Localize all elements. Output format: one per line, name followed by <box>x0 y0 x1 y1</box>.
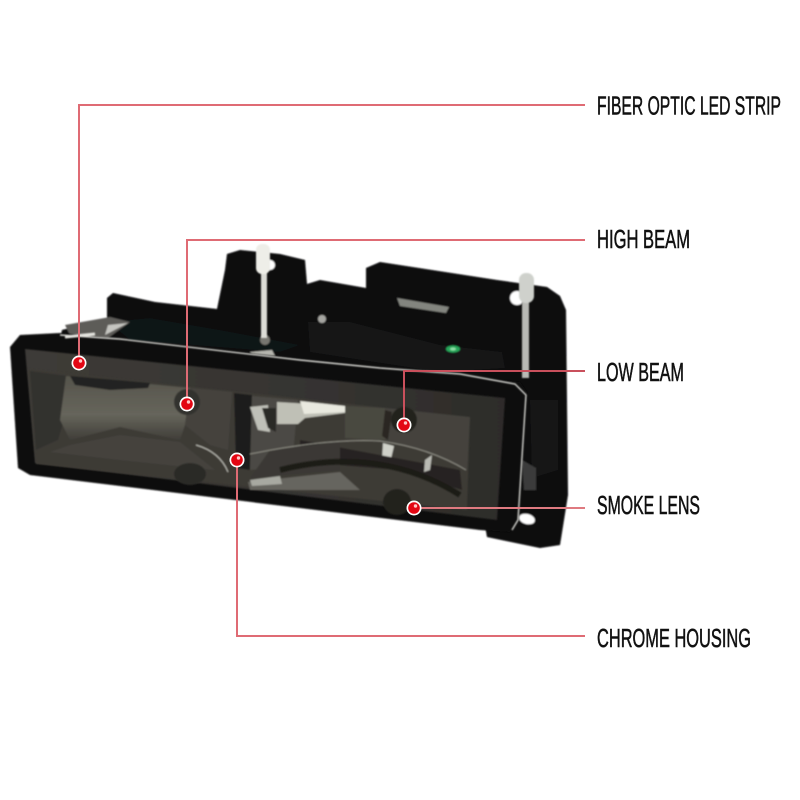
label: SMOKE LENS <box>597 492 700 520</box>
callout: smoke lens <box>406 492 700 520</box>
callout: fiber optic LED strip <box>72 92 781 370</box>
mounting pins <box>256 244 534 378</box>
label: LOW BEAM <box>597 359 684 387</box>
marker dot <box>230 452 244 468</box>
leader line <box>414 507 585 509</box>
callout: low beam <box>396 359 684 432</box>
rear housing <box>60 250 568 548</box>
lens interior reflectors <box>28 369 470 515</box>
marker dot <box>406 500 422 516</box>
chrome trim <box>60 334 526 530</box>
callout: high beam <box>180 226 690 412</box>
label: HIGH BEAM <box>597 226 690 254</box>
leader line <box>79 105 585 363</box>
smoke lens face <box>25 349 505 520</box>
leader line <box>404 371 585 425</box>
callout: chrome housing <box>230 452 751 653</box>
marker dot <box>180 396 194 412</box>
marker dot <box>396 418 412 432</box>
headlight assembly photo <box>10 244 568 548</box>
marker dot <box>72 356 86 370</box>
lens outer frame <box>10 333 527 532</box>
leader line <box>237 460 585 636</box>
leader line <box>187 240 585 404</box>
